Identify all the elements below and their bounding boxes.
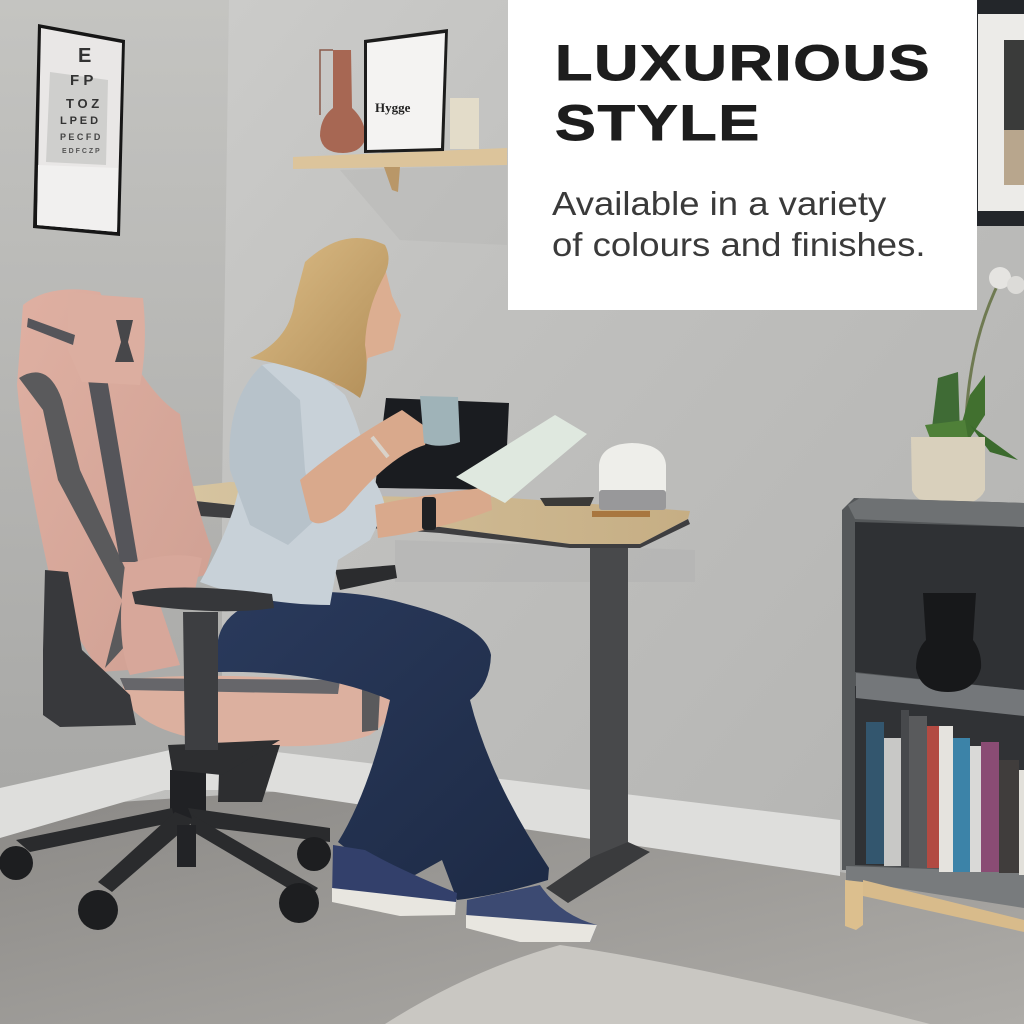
smart speaker — [599, 443, 666, 495]
rug — [385, 945, 930, 1024]
framed eye chart: P E C F D — [60, 132, 101, 142]
right wall frame — [977, 0, 1024, 226]
orchid plant — [911, 267, 1024, 506]
dark side stripes — [19, 372, 135, 668]
side bracket — [43, 570, 136, 727]
hair — [250, 238, 389, 398]
books — [866, 710, 1024, 875]
left wall — [0, 0, 229, 790]
shoes — [332, 845, 457, 913]
heading: STYLE — [555, 95, 761, 151]
candle — [450, 98, 479, 149]
standing desk — [186, 443, 695, 903]
wall shelf with decor — [293, 29, 507, 192]
arms — [300, 410, 430, 523]
heading — [555, 35, 931, 151]
bookcase — [842, 498, 1024, 932]
skirting boards — [0, 750, 840, 876]
framed eye chart: F P — [70, 72, 93, 89]
chair armrest — [132, 587, 274, 750]
heading: LUXURIOUS — [555, 35, 931, 91]
jeans — [218, 592, 549, 900]
wall shelf with decor: Hygge — [375, 100, 411, 115]
torso — [200, 363, 385, 605]
chair back — [17, 289, 212, 672]
floor carpet — [0, 790, 1024, 1024]
phone and tablet on desk — [540, 497, 594, 506]
back arm of chair under torso — [335, 565, 397, 590]
woman — [200, 238, 597, 942]
desk shadow on wall — [395, 540, 695, 582]
framed eye chart: E — [78, 45, 91, 67]
framed eye chart: T O Z — [66, 96, 99, 111]
subtitle text: of colours and finishes. — [552, 227, 925, 264]
Hygge print — [364, 29, 448, 153]
framed eye chart — [33, 24, 125, 236]
vase — [320, 50, 365, 153]
base — [170, 770, 206, 820]
subtitle text — [552, 186, 925, 264]
framed eye chart: E D F C Z P — [62, 148, 100, 155]
chair — [0, 289, 397, 930]
headline card — [508, 0, 977, 310]
black vase — [916, 593, 981, 692]
open book — [456, 415, 587, 503]
shelf shadow on wall — [340, 165, 507, 245]
laptop — [370, 398, 509, 498]
neck and face — [335, 268, 401, 392]
mug — [420, 396, 460, 446]
framed eye chart: L P E D — [60, 115, 98, 127]
headrest pillow — [68, 292, 145, 385]
lumbar cushion — [121, 555, 202, 675]
subtitle text: Available in a variety — [552, 186, 886, 223]
bookcase legs — [845, 880, 863, 930]
casters — [0, 846, 33, 880]
seat — [122, 676, 397, 746]
